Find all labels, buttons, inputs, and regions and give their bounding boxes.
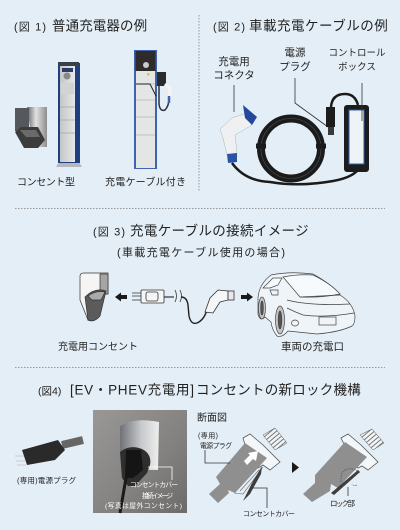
icon: cable coil bbox=[232, 94, 358, 184]
label: with charging cable: 充電ケーブル付き bbox=[105, 176, 186, 188]
panel: figure 1 normal chargers bbox=[14, 18, 186, 188]
heading: figure 3: (図 3) bbox=[93, 226, 125, 238]
diagram: cross-section unlocked bbox=[198, 428, 295, 518]
label: vehicle charging port: 車両の充電口 bbox=[281, 340, 344, 353]
heading: figure 1: 普通充電器の例 bbox=[52, 18, 147, 34]
heading: figure 4: コンセントの新ロック機構 bbox=[196, 382, 361, 398]
label: charging connector: コネクタ bbox=[213, 70, 255, 82]
panel: figure 3 connection image bbox=[58, 222, 355, 353]
label: outlet type: コンセント型 bbox=[17, 176, 75, 188]
label: outlet cover: コンセントカバー bbox=[243, 510, 295, 518]
heading: figure 4: [EV・PHEV充電用] bbox=[70, 382, 194, 398]
panel: figure 2 on-board charging cable bbox=[213, 18, 388, 184]
icon: power plug bbox=[326, 107, 335, 135]
label: power plug: 電源プラグ bbox=[200, 441, 232, 450]
caption: connection image: 接続イメージ bbox=[142, 491, 173, 500]
icon: charging stand bbox=[56, 62, 82, 167]
leader lines bbox=[234, 78, 328, 127]
label: dedicated power plug: (専用)電源プラグ bbox=[17, 475, 76, 485]
panel: figure 4 new lock mechanism bbox=[15, 382, 384, 518]
icon: wall outlet charger bbox=[15, 107, 47, 148]
arrow: right bbox=[241, 292, 253, 302]
label: cross-section: 断面図 bbox=[197, 412, 227, 424]
heading: figure 4: (図4) bbox=[38, 386, 61, 398]
icon: outlet line drawing bbox=[80, 273, 108, 321]
arrow: right triangle bbox=[292, 462, 299, 473]
label: lock part: ロック部 bbox=[330, 499, 356, 508]
heading: figure 2: (図 2) bbox=[213, 20, 245, 34]
icon: plug and cable bbox=[132, 290, 234, 323]
heading: figure 3: 充電ケーブルの接続イメージ bbox=[130, 222, 309, 238]
icon: car line drawing bbox=[258, 273, 355, 336]
caption: outdoor outlet note: (写真は屋外コンセント) bbox=[105, 501, 182, 510]
diagram: cross-section locked bbox=[303, 429, 384, 508]
heading: figure 1: (図 1) bbox=[14, 20, 46, 34]
icon: connector bbox=[220, 105, 257, 163]
icon: dedicated power plug bbox=[15, 440, 83, 465]
icon: charging stand with cable bbox=[134, 50, 170, 169]
heading: figure 4 bbox=[38, 382, 361, 398]
heading: figure 2: 車載充電ケーブルの例 bbox=[249, 18, 388, 34]
subheading: (車載充電ケーブル使用の場合) bbox=[117, 245, 285, 259]
arrow: left bbox=[115, 292, 127, 302]
label: charging outlet: 充電用コンセント bbox=[58, 341, 138, 353]
label: control box: ボックス bbox=[338, 62, 376, 73]
label: power plug: プラグ bbox=[279, 60, 311, 73]
caption: outlet cover: コンセントカバー bbox=[130, 481, 178, 489]
photo: outlet cover connection image bbox=[93, 410, 187, 513]
label: power plug: 電源 bbox=[284, 47, 306, 59]
icon: control box bbox=[344, 83, 369, 172]
label: dedicated: (専用) bbox=[198, 431, 218, 440]
label: control box: コントロール bbox=[328, 48, 386, 59]
label: charging connector: 充電用 bbox=[218, 56, 250, 68]
